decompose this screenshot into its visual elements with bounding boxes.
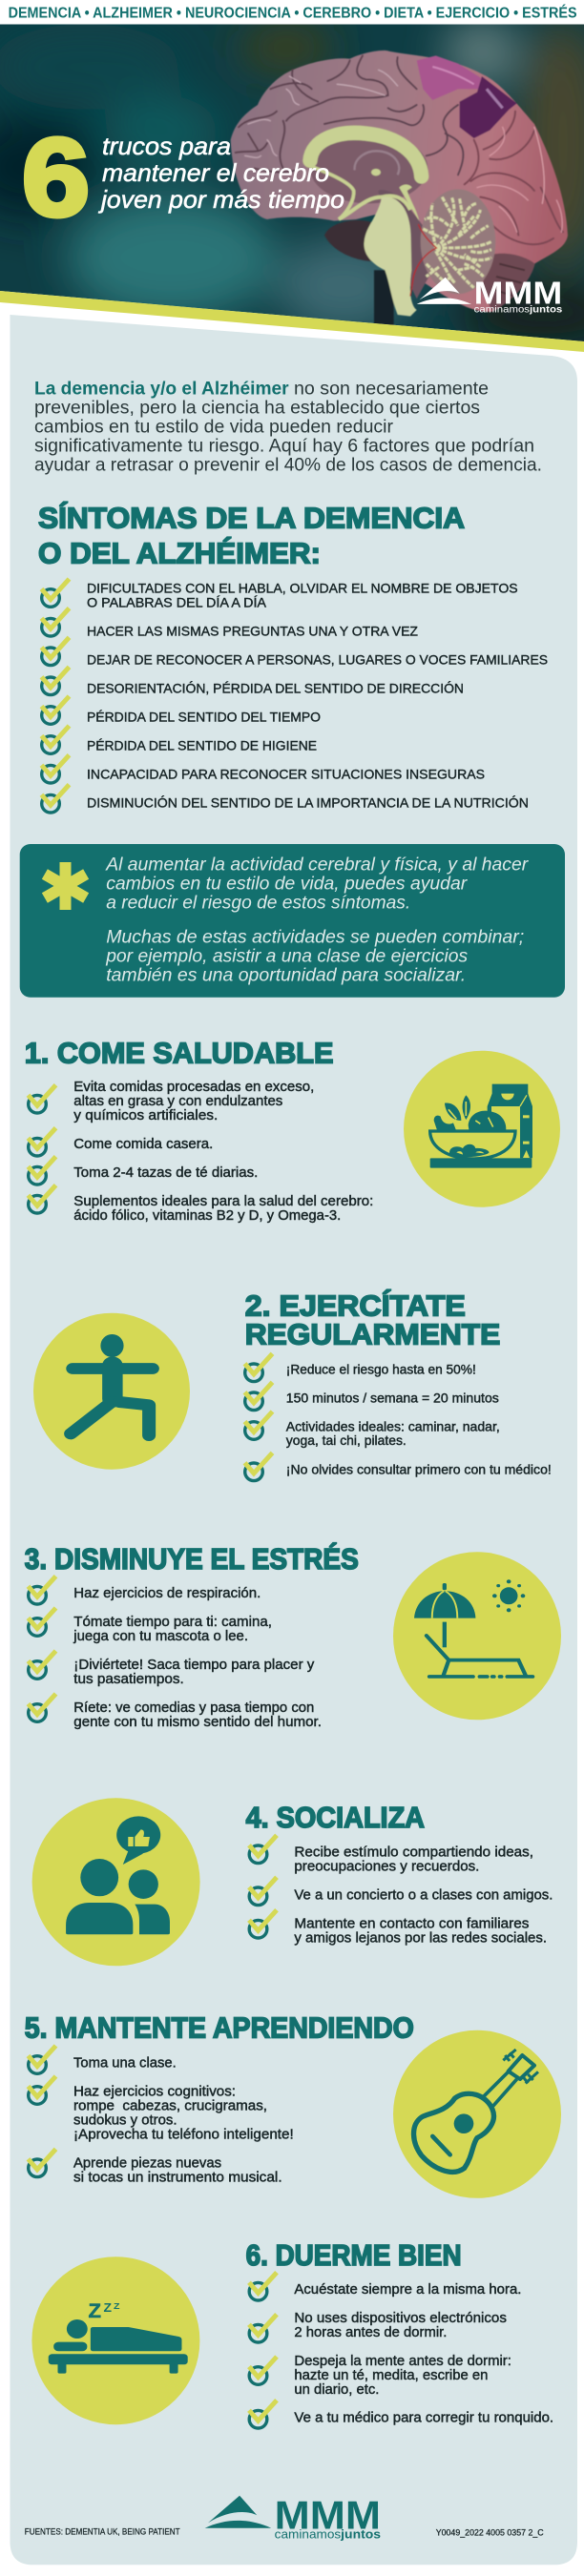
item [29, 1577, 261, 1604]
item: Evita comidas procesadas en exceso, [73, 1080, 314, 1095]
cerebellum [421, 189, 495, 294]
callout text: Al aumentar la actividad cerebral y física, y al hacer [105, 854, 530, 875]
item: Acuéstate siempre a la misma hora. [294, 2282, 521, 2298]
icon: person sleeping: Z [103, 2301, 112, 2315]
callout text: cambios en tu estilo de vida, puedes ayudar [106, 873, 469, 894]
item: Actividades ideales: caminar, nadar, [286, 1419, 500, 1434]
symptom item: DEJAR DE RECONOCER A PERSONAS, LUGARES O VOCES FAMILIARES [87, 652, 548, 668]
item: Recibe estímulo compartiendo ideas, [294, 1845, 533, 1861]
footer code: Y0049_2022 4005 0357 2_C [436, 2528, 544, 2538]
symptom item: INCAPACIDAD PARA RECONOCER SITUACIONES INSEGURAS [87, 767, 485, 782]
item: ¡No olvides consultar primero con tu médico! [286, 1462, 552, 1477]
icon: beach chair and sun [393, 1552, 561, 1720]
item: y amigos lejanos por las redes sociales. [294, 1931, 547, 1947]
symptom item [42, 667, 464, 696]
white logo in hero [417, 276, 562, 315]
item: si tocas un instrumento musical. [73, 2171, 282, 2186]
intro paragraph: La demencia y/o el Alzhéimer [34, 378, 289, 399]
heading [245, 1288, 500, 1350]
item: ¡Diviértete! Saca tiempo para placer y [73, 1658, 315, 1673]
brain model [231, 51, 568, 327]
item: ¡Reduce el riesgo hasta en 50%! [286, 1362, 476, 1377]
heading: 6. DUERME BIEN [246, 2238, 462, 2272]
item [249, 1910, 547, 1947]
yellow diagonal band [0, 291, 584, 352]
item [29, 1608, 272, 1644]
item: juega con tu mascota o lee. [73, 1629, 248, 1644]
intro paragraph: no son necesariamente [294, 378, 489, 399]
intro paragraph: prevenibles, pero la ciencia ha establecido que ciertos [34, 397, 480, 418]
footer sources: FUENTES: DEMENTIA UK, BEING PATIENT [25, 2527, 180, 2538]
icon: people talking [32, 1798, 200, 1966]
intro paragraph: ayudar a retrasar o prevenir el 40% de los casos de demencia. [34, 454, 542, 475]
item [249, 1877, 553, 1906]
icon: person sleeping [31, 2257, 199, 2424]
symptom item: DESORIENTACIÓN, PÉRDIDA DEL SENTIDO DE DIRECCIÓN [87, 681, 464, 696]
icon: asterisk [42, 862, 89, 910]
item [244, 1353, 476, 1382]
item: Despeja la mente antes de dormir: [294, 2354, 511, 2369]
item: Aprende piezas nuevas [73, 2156, 221, 2172]
footer logo [205, 2493, 381, 2542]
item: Mantente en contacto con familiares [294, 1917, 529, 1932]
heading: REGULARMENTE [245, 1317, 500, 1350]
item [29, 2076, 294, 2143]
symptom item [42, 755, 485, 783]
item: Ve a un concierto o a clases con amigos. [294, 1888, 553, 1904]
heading: 2. EJERCÍTATE [245, 1288, 466, 1322]
symptom item [42, 637, 548, 668]
icon: person sleeping: Z [114, 2301, 120, 2311]
item: hazte un té, medita, escribe en [294, 2368, 488, 2383]
item: tus pasatiempos. [73, 1672, 184, 1687]
item [29, 2149, 282, 2186]
symptom item [42, 785, 529, 813]
callout text: a reducir el riesgo de estos síntomas. [106, 892, 410, 913]
title lines [98, 132, 344, 214]
symptom item [42, 696, 321, 725]
symptom item [42, 608, 418, 639]
item: 2 horas antes de dormir. [294, 2325, 447, 2340]
item: 150 minutos / semana = 20 minutos [286, 1391, 499, 1406]
symptom item [42, 726, 317, 753]
symptom item: DISMINUCIÓN DEL SENTIDO DE LA IMPORTANCIA DE LA NUTRICIÓN [87, 795, 529, 811]
corpus callosum and brainstem [310, 133, 422, 176]
intro paragraph: significativamente tu riesgo. Aquí hay 6 factores que podrían [34, 435, 534, 456]
icon: person sleeping: Z [88, 2300, 101, 2322]
item [244, 1412, 500, 1448]
section 4: socializa [32, 1798, 553, 1966]
item [29, 1128, 213, 1156]
symptom item [42, 579, 518, 610]
item: y químicos artificiales. [73, 1108, 218, 1123]
item: ácido fólico, vitaminas B2 y D, y Omega-3. [73, 1208, 341, 1224]
callout text: Muchas de estas actividades se pueden combinar; [106, 926, 524, 947]
item [244, 1453, 552, 1481]
section 5: mantente aprendiendo [25, 2011, 561, 2198]
item [29, 1157, 258, 1185]
heading: 5. MANTENTE APRENDIENDO [25, 2011, 414, 2045]
title lines: trucos para [102, 132, 231, 160]
item: rompe cabezas, crucigramas, [73, 2099, 267, 2114]
item: Come comida casera. [73, 1137, 213, 1152]
symptom item: DIFICULTADES CON EL HABLA, OLVIDAR EL NOMBRE DE OBJETOS [87, 581, 518, 596]
hero title [22, 115, 344, 239]
icon: healthy food [404, 1051, 560, 1207]
symptoms checklist [42, 579, 548, 813]
hero banner with brain photo [0, 19, 584, 348]
item: yoga, tai chi, pilates. [286, 1432, 407, 1448]
item: No uses dispositivos electrónicos [294, 2311, 507, 2326]
white logo in hero: caminamos [474, 303, 530, 315]
white logo in hero: juntos [529, 303, 562, 315]
item: Ríete: ve comedias y pasa tiempo con [73, 1700, 314, 1716]
footer logo: MMM [275, 2493, 381, 2538]
section 1: come saludable [25, 1036, 560, 1224]
item: altas en grasa y con endulzantes [73, 1094, 282, 1109]
item: Haz ejercicios de respiración. [73, 1586, 261, 1601]
item: Tómate tiempo para ti: camina, [73, 1615, 272, 1630]
item: Toma 2-4 tazas de té diarias. [73, 1165, 258, 1181]
item [29, 1185, 373, 1224]
item [29, 1651, 315, 1687]
item: ¡Aprovecha tu teléfono inteligente! [73, 2128, 294, 2143]
symptoms heading: SÍNTOMAS DE LA DEMENCIA [38, 501, 465, 534]
white logo in hero: MMM [474, 276, 562, 311]
heading: 4. SOCIALIZA [246, 1801, 425, 1834]
item [29, 1694, 322, 1730]
item: Ve a tu médico para corregir tu ronquido. [294, 2410, 553, 2425]
symptom item: PÉRDIDA DEL SENTIDO DEL TIEMPO [87, 710, 321, 725]
icon: guitar [393, 2030, 561, 2198]
callout text: también es una oportunidad para socializar. [106, 964, 466, 985]
item [244, 1382, 499, 1411]
item [249, 2311, 507, 2342]
footer logo: caminamos [275, 2527, 342, 2542]
item: Toma una clase. [73, 2056, 177, 2071]
item: gente con tu mismo sentido del humor. [73, 1715, 322, 1730]
callout box [20, 844, 565, 998]
symptom item: PÉRDIDA DEL SENTIDO DE HIGIENE [87, 738, 317, 753]
item [249, 1835, 533, 1875]
item [249, 2401, 553, 2428]
intro paragraph: cambios en tu estilo de vida pueden reducir [34, 416, 393, 437]
big number six: 6 [22, 115, 90, 239]
item: preocupaciones y recuerdos. [294, 1860, 479, 1875]
symptoms heading: O DEL ALZHÉIMER: [38, 537, 321, 570]
heading: 1. COME SALUDABLE [25, 1036, 333, 1069]
intro paragraph [34, 378, 542, 475]
symptom item: O PALABRAS DEL DÍA A DÍA [87, 595, 267, 610]
symptom item: HACER LAS MISMAS PREGUNTAS UNA Y OTRA VEZ [87, 624, 418, 639]
section 3: disminuye el estres [25, 1542, 561, 1730]
footer logo: juntos [340, 2527, 381, 2542]
item: sudokus y otros. [73, 2113, 177, 2129]
item [249, 2273, 521, 2300]
item: Haz ejercicios cognitivos: [73, 2085, 236, 2100]
item [29, 2046, 177, 2073]
section 2: ejercitate regularmente [33, 1288, 552, 1481]
section 6: duerme bien [31, 2238, 553, 2428]
callout text [105, 854, 530, 985]
callout text: por ejemplo, asistir a una clase de ejercicios [105, 945, 468, 966]
title lines: mantener el cerebro [102, 158, 329, 187]
item [249, 2354, 511, 2398]
item [29, 1080, 314, 1123]
item: Suplementos ideales para la salud del cerebro: [73, 1194, 373, 1209]
title lines: joven por más tiempo [98, 185, 344, 214]
icon: exercise pose [33, 1313, 190, 1470]
heading: 3. DISMINUYE EL ESTRÉS [25, 1542, 359, 1576]
symptoms heading [38, 501, 465, 570]
item: un diario, etc. [294, 2382, 379, 2398]
